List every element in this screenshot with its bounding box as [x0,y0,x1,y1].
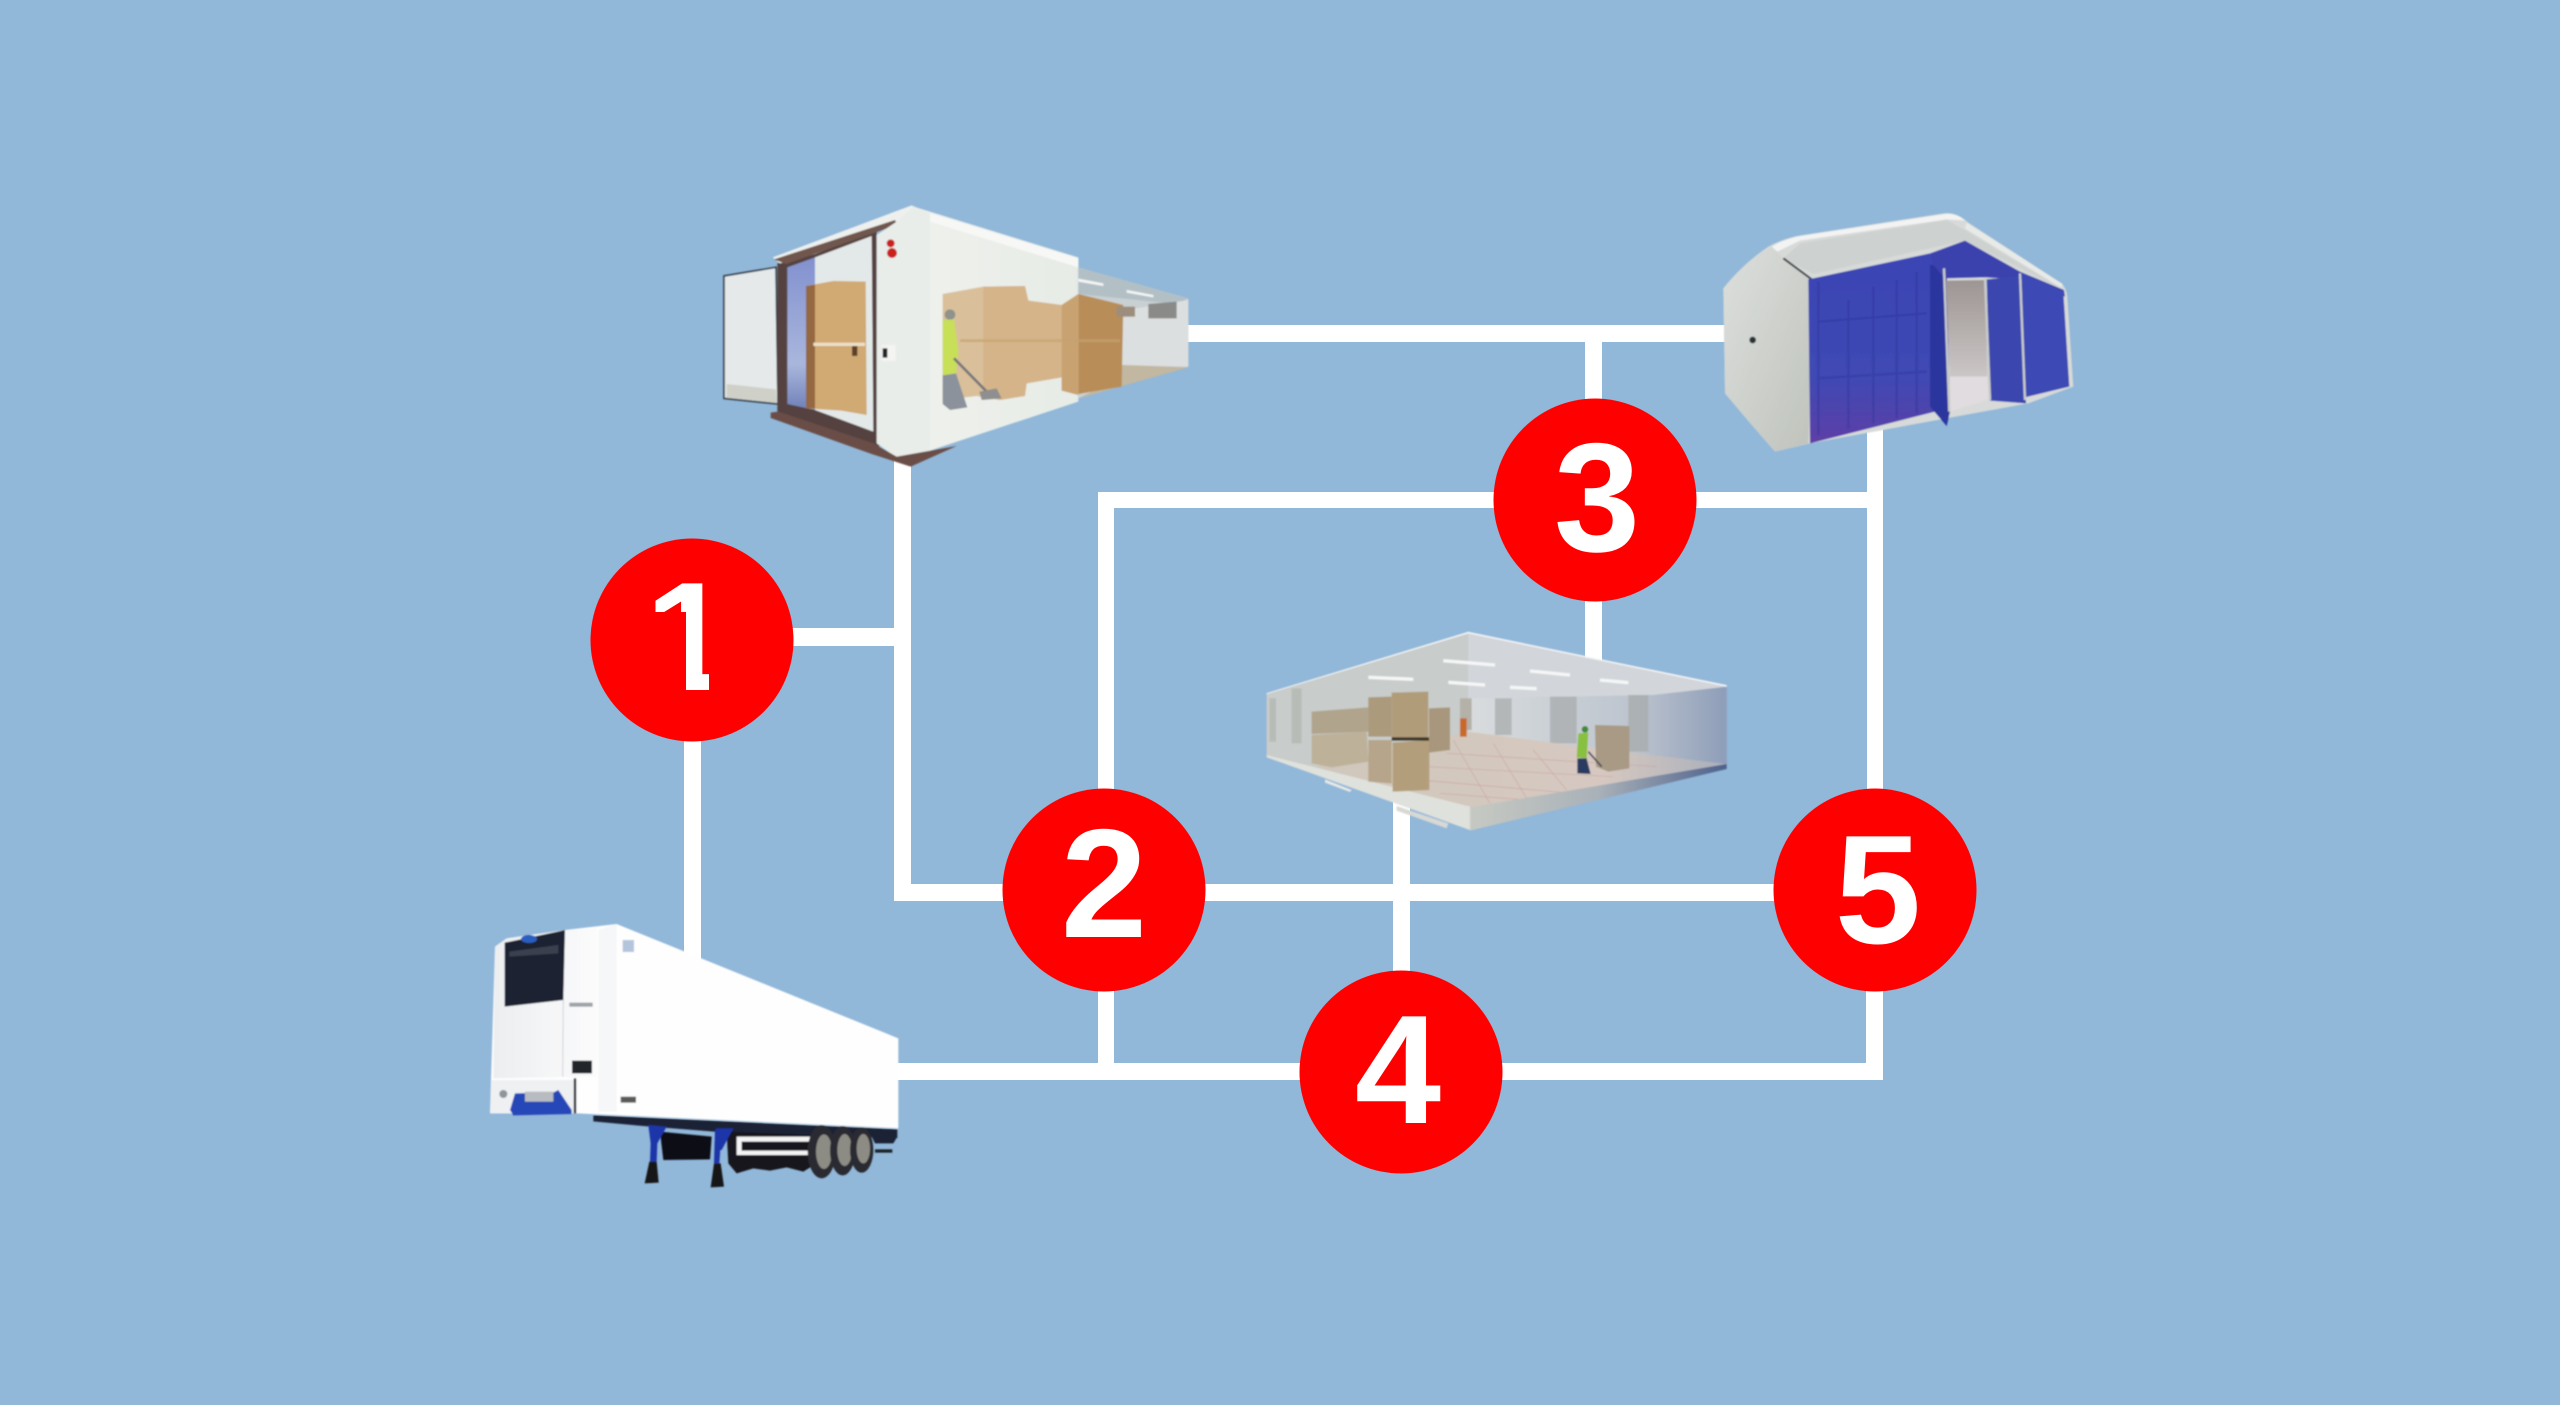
badge 5: 5 [1835,803,1921,976]
image: refrigerated container [724,205,1188,467]
trailer body [490,924,898,1128]
cargo boxes front [806,281,867,415]
badge 1 [590,538,794,742]
unit logo [521,935,537,943]
corner post [877,207,930,457]
side guard [737,1137,814,1155]
badge 1: 1 [645,550,731,723]
door opening [1946,280,1987,377]
chassis [593,1115,897,1138]
glass door panel [815,236,873,432]
door frame [777,232,882,448]
blue arch [1930,241,2065,297]
blue right curtains [1987,276,2026,403]
back wall doors [1495,695,1648,752]
roof rail [773,205,930,263]
interior end section [1078,267,1188,398]
alarm [887,239,895,247]
landing legs [648,1125,667,1162]
front floor edge [1267,755,1470,830]
badge 3: 3 [1554,411,1640,584]
tent side panel [1723,247,1812,452]
badge 5 [1774,788,1976,992]
pallet stacks [1312,732,1368,767]
left wall panels [1269,688,1302,743]
line: container down to circle 2 [894,460,1110,901]
line: warehouse down to circle 4 [1393,800,1410,1000]
line: container to tent [1180,325,1740,342]
line: circle 2 down to bottom row [1098,960,1114,1070]
interior visible through side panel [943,286,1078,400]
worker orange [1460,718,1467,737]
side access box [882,345,896,361]
line: circle 1 to container line [780,628,900,646]
line: circle 2 up and across to tent line [1098,492,1882,892]
blue left curtain [1808,253,1950,443]
lower bracket [490,1080,577,1113]
badge 3 [1494,398,1696,602]
badge 4 [1300,970,1502,1174]
rear tyres behind guard [727,1132,817,1173]
black grille [505,930,565,1007]
wheels [808,1125,873,1178]
line: circle 1 to trailer [684,720,701,980]
line: tent to circle 5 [1867,420,1883,900]
base frame [771,412,957,467]
line: bottom row and right vertical [890,960,1883,1080]
tent shell [1723,213,2073,452]
roof strap [1783,258,1812,279]
floor [1313,732,1727,808]
refrigeration unit front [493,928,597,1078]
door poles [1944,268,2025,412]
connector lines [684,325,1890,1080]
valve [1749,337,1756,343]
image: cold room warehouse [1267,633,1727,831]
line: middle row circle 2 to circle 5 [1190,884,1890,901]
image: refrigerated trailer [490,924,898,1187]
badge 2 [1002,788,1206,992]
line: top line through circle 3 to warehouse [1585,325,1602,665]
worker green with pallet [1582,726,1588,733]
badge 2: 2 [1061,797,1147,970]
toolbox [660,1132,712,1160]
unit panel details [572,1061,592,1073]
warehouse walls [1267,633,1727,830]
badge 4: 4 [1355,983,1441,1156]
image: inflatable tent [1723,213,2073,452]
open door [724,267,778,404]
strip curtain [787,257,815,410]
ceiling lights [1368,661,1628,689]
worker and pallet truck [945,309,955,320]
side panel [912,206,1078,457]
